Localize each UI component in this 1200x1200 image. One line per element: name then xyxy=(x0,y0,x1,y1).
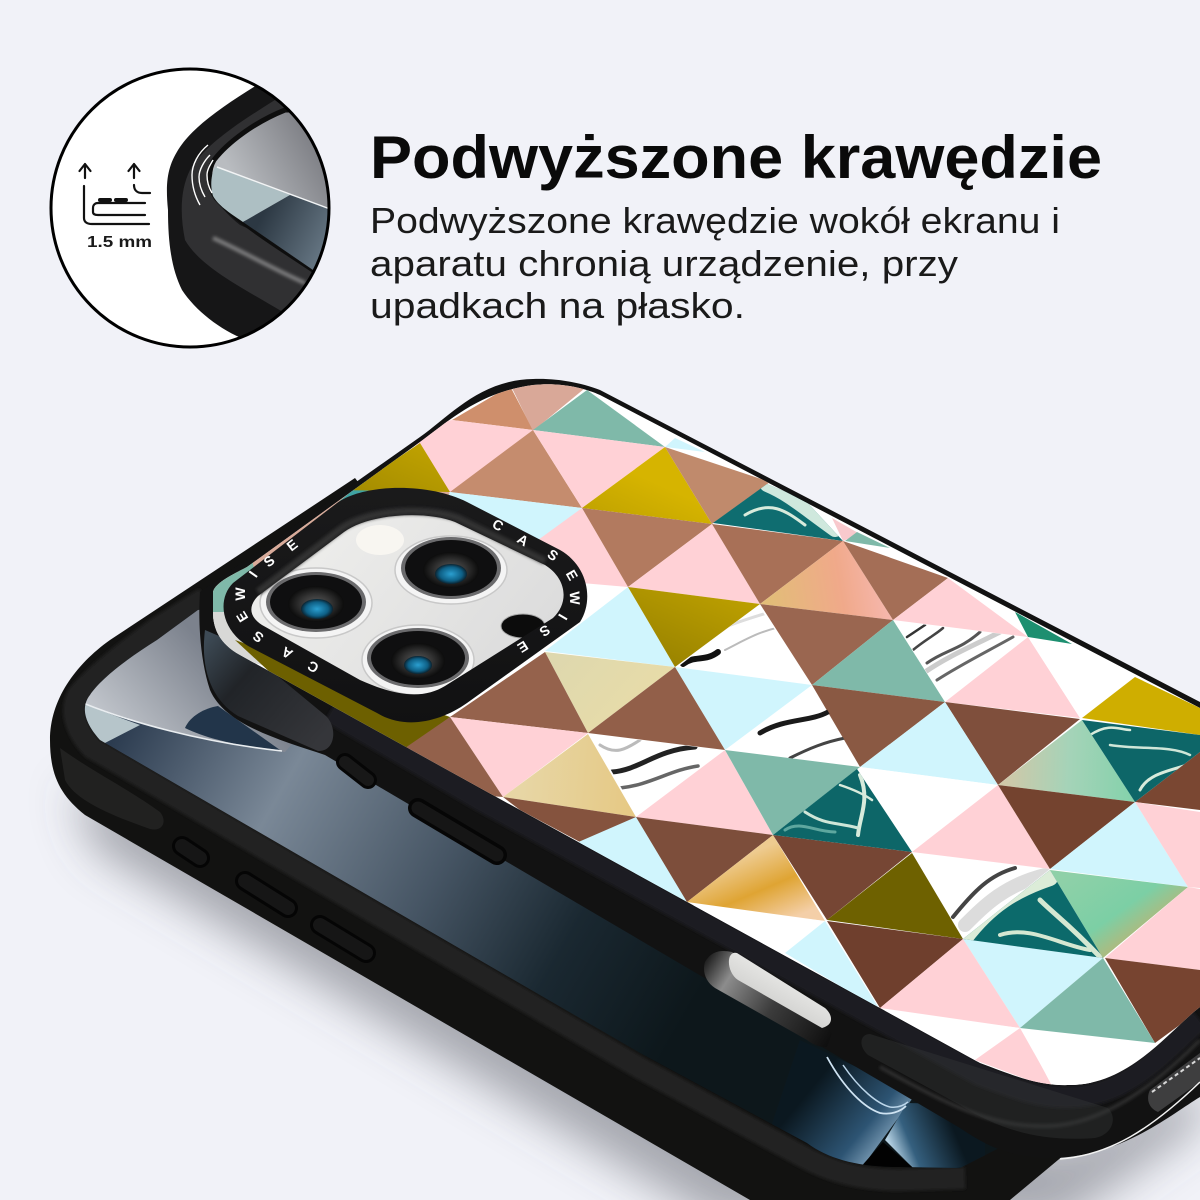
lower phone screen xyxy=(84,610,997,1168)
CASEWISE ring text: C xyxy=(305,658,321,676)
wallpaper blue glow xyxy=(782,1059,912,1165)
description xyxy=(370,200,1060,326)
lens B xyxy=(395,536,507,604)
wallpaper pale corner xyxy=(83,704,140,744)
rim highlight xyxy=(880,1040,1200,1126)
case bottom highlight xyxy=(1060,1082,1200,1159)
inset screen pale area xyxy=(211,167,290,222)
lower phone case body xyxy=(50,478,1070,1200)
side button: volume down xyxy=(320,925,366,953)
inset outline xyxy=(51,69,329,347)
side button: small xyxy=(182,846,200,858)
bezel inner ramp highlight xyxy=(258,511,545,592)
triangles xyxy=(235,384,1200,1090)
flash xyxy=(356,525,404,555)
CASEWISE ring text: W xyxy=(567,591,583,606)
wallpaper dark shape xyxy=(185,706,280,750)
icon label: 1.5 mm xyxy=(87,234,152,251)
inset disc xyxy=(51,69,329,347)
panel left teal xyxy=(213,563,254,619)
inset rim highlight xyxy=(213,238,305,283)
buttons xyxy=(100,198,126,202)
side button: volume up xyxy=(245,881,288,908)
lens A xyxy=(260,568,372,638)
CASEWISE ring text: E xyxy=(233,609,251,625)
panel left marble xyxy=(213,612,262,665)
corner translucent pad xyxy=(861,1034,1113,1139)
lens side pad xyxy=(204,630,333,751)
inset screen line xyxy=(217,167,330,209)
panel top teal sliver xyxy=(338,480,370,502)
CASEWISE ring text: I xyxy=(245,568,261,580)
upper phone raised rim xyxy=(330,712,1200,1097)
CASEWISE ring text: E xyxy=(515,638,531,656)
wallpaper curve line xyxy=(83,703,282,751)
raised lip xyxy=(134,185,150,193)
CASEWISE ring text: A xyxy=(514,531,532,549)
camera module xyxy=(224,488,587,722)
phone profile xyxy=(93,203,145,215)
title: Podwyższone krawędzie xyxy=(370,124,1102,191)
lens C xyxy=(362,625,474,695)
corner translucent pad xyxy=(60,748,164,830)
description: Podwyższone krawędzie wokół ekranu i xyxy=(370,200,1060,241)
wallpaper black triangle xyxy=(863,1142,912,1168)
camera plateau xyxy=(246,511,570,701)
silver action button xyxy=(729,953,831,1028)
lower phone in case xyxy=(50,478,1070,1200)
charging port xyxy=(1148,1053,1200,1112)
action button socket xyxy=(704,951,832,1047)
CASEWISE ring text: S xyxy=(537,622,553,640)
arrow right xyxy=(128,164,140,178)
inset screen xyxy=(210,110,340,270)
CASEWISE ring text: I xyxy=(555,611,571,623)
wallpaper light curves xyxy=(827,1057,906,1114)
arrow left xyxy=(80,164,90,178)
panel left sliver behind camera xyxy=(213,468,468,620)
inset impact arcs xyxy=(192,145,213,205)
microphone hole xyxy=(501,614,545,638)
circular inset: raised edge detail xyxy=(51,69,340,350)
side button: mute switch xyxy=(345,762,368,780)
inset screen dark area xyxy=(243,195,328,270)
CASEWISE ring text: S xyxy=(545,546,561,564)
inset phone corner xyxy=(166,86,328,337)
description: upadkach na płasko. xyxy=(370,285,745,326)
icon: raised edge diagram xyxy=(80,164,150,224)
side button: long xyxy=(418,808,497,855)
marble vein textures xyxy=(600,485,1200,965)
CASEWISE ring text: E xyxy=(283,536,301,554)
case profile xyxy=(84,186,149,224)
CASEWISE ring text: A xyxy=(279,644,295,662)
phone back pattern panel xyxy=(200,370,1200,1100)
upper phone in case xyxy=(199,379,1200,1159)
CASEWISE ring text: S xyxy=(260,552,278,570)
inset translucent band xyxy=(182,100,312,311)
description: aparatu chronią urządzenie, przy xyxy=(370,243,958,284)
upper phone case body xyxy=(199,379,1200,1158)
wallpaper grey area xyxy=(85,610,292,752)
CASEWISE ring text: S xyxy=(250,628,266,646)
CASEWISE ring text xyxy=(232,516,583,676)
CASEWISE ring text: C xyxy=(490,516,506,534)
CASEWISE ring text: W xyxy=(232,587,248,601)
phone shadow xyxy=(70,790,1200,1200)
lower phone case raised rim xyxy=(74,598,965,1180)
CASEWISE ring text: E xyxy=(563,567,581,583)
camera bezel ring xyxy=(224,488,587,722)
